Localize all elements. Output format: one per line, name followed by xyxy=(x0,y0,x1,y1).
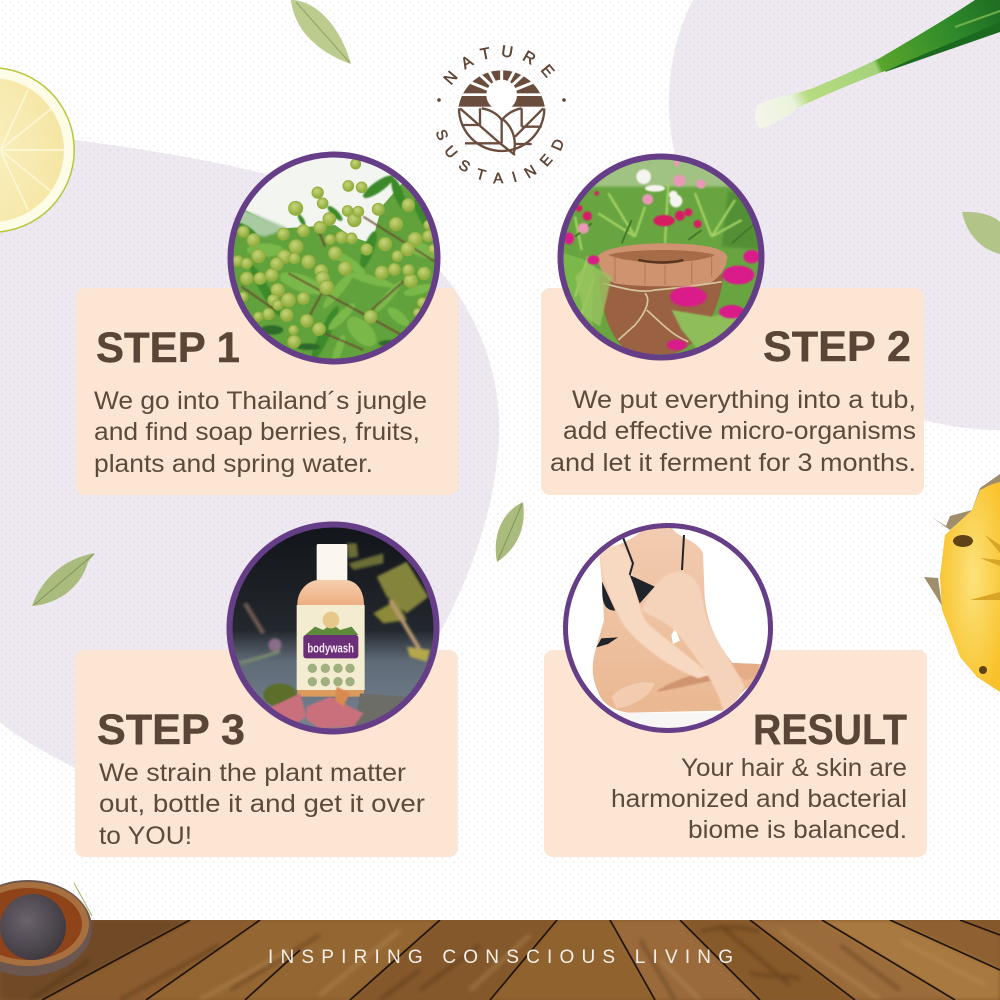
panel: result xyxy=(544,520,927,857)
panel: step 2 xyxy=(541,150,924,495)
photo: soap berries xyxy=(225,150,445,370)
wood floor xyxy=(0,920,1000,1000)
icon: lemon slice xyxy=(0,67,75,233)
heading: result: RESULT xyxy=(753,706,907,754)
text: step 3 description: out, bottle it and get it over xyxy=(99,790,425,818)
photo: body wash bottle xyxy=(220,520,450,740)
logo: emblem xyxy=(457,69,547,155)
icon: leaf left xyxy=(32,553,95,606)
text: step 1 description: We go into Thailand´s jungle xyxy=(94,387,427,415)
text: result description xyxy=(611,754,907,844)
text: step 2 description xyxy=(550,386,916,477)
lilac blob: top right xyxy=(669,0,1000,430)
text: step 2 description: add effective micro-organisms xyxy=(563,417,916,445)
text: result description: biome is balanced. xyxy=(688,816,907,844)
panel: step 3 xyxy=(75,520,458,857)
logo: SUSTAINED: SUSTAINED xyxy=(436,130,563,184)
photo: body wash bottle: bodywash xyxy=(307,640,354,655)
photo: woman with smooth skin xyxy=(558,520,778,740)
icon: soap nut xyxy=(0,880,92,976)
text: result description: Your hair & skin are xyxy=(681,754,907,782)
heading: step 1: STEP 1 xyxy=(96,324,240,372)
text: step 1 description xyxy=(94,387,427,478)
logo: NATURE: NATURE xyxy=(443,45,555,85)
footer tagline: INSPIRING CONSCIOUS LIVING xyxy=(268,947,733,968)
icon: leaf right xyxy=(962,212,1000,254)
panel: step 1 xyxy=(76,150,458,495)
text: step 3 description xyxy=(99,759,425,850)
text: step 2 description: and let it ferment for 3 months. xyxy=(550,449,916,477)
logo xyxy=(436,45,566,184)
icon: leaf centre xyxy=(496,502,524,562)
icon: leaf top xyxy=(291,0,351,64)
icon: green onion xyxy=(755,0,1000,128)
decorative bottle xyxy=(317,544,347,581)
heading: step 2: STEP 2 xyxy=(763,323,911,371)
text: step 2 description: We put everything into a tub, xyxy=(572,386,916,414)
decorative pot body xyxy=(600,273,723,354)
photo: fermenting pot in flowers xyxy=(555,150,770,365)
text: result description: harmonized and bacterial xyxy=(611,785,907,813)
text: step 3 description: to YOU! xyxy=(99,822,192,850)
heading: step 3: STEP 3 xyxy=(97,706,245,754)
text: step 1 description: plants and spring water. xyxy=(94,450,373,478)
text: step 1 description: and find soap berries, fruits, xyxy=(94,418,420,446)
icon: pineapple xyxy=(924,474,1000,692)
logo: dots xyxy=(437,98,566,102)
text: step 3 description: We strain the plant matter xyxy=(99,759,406,787)
lilac blob: left xyxy=(0,135,499,850)
